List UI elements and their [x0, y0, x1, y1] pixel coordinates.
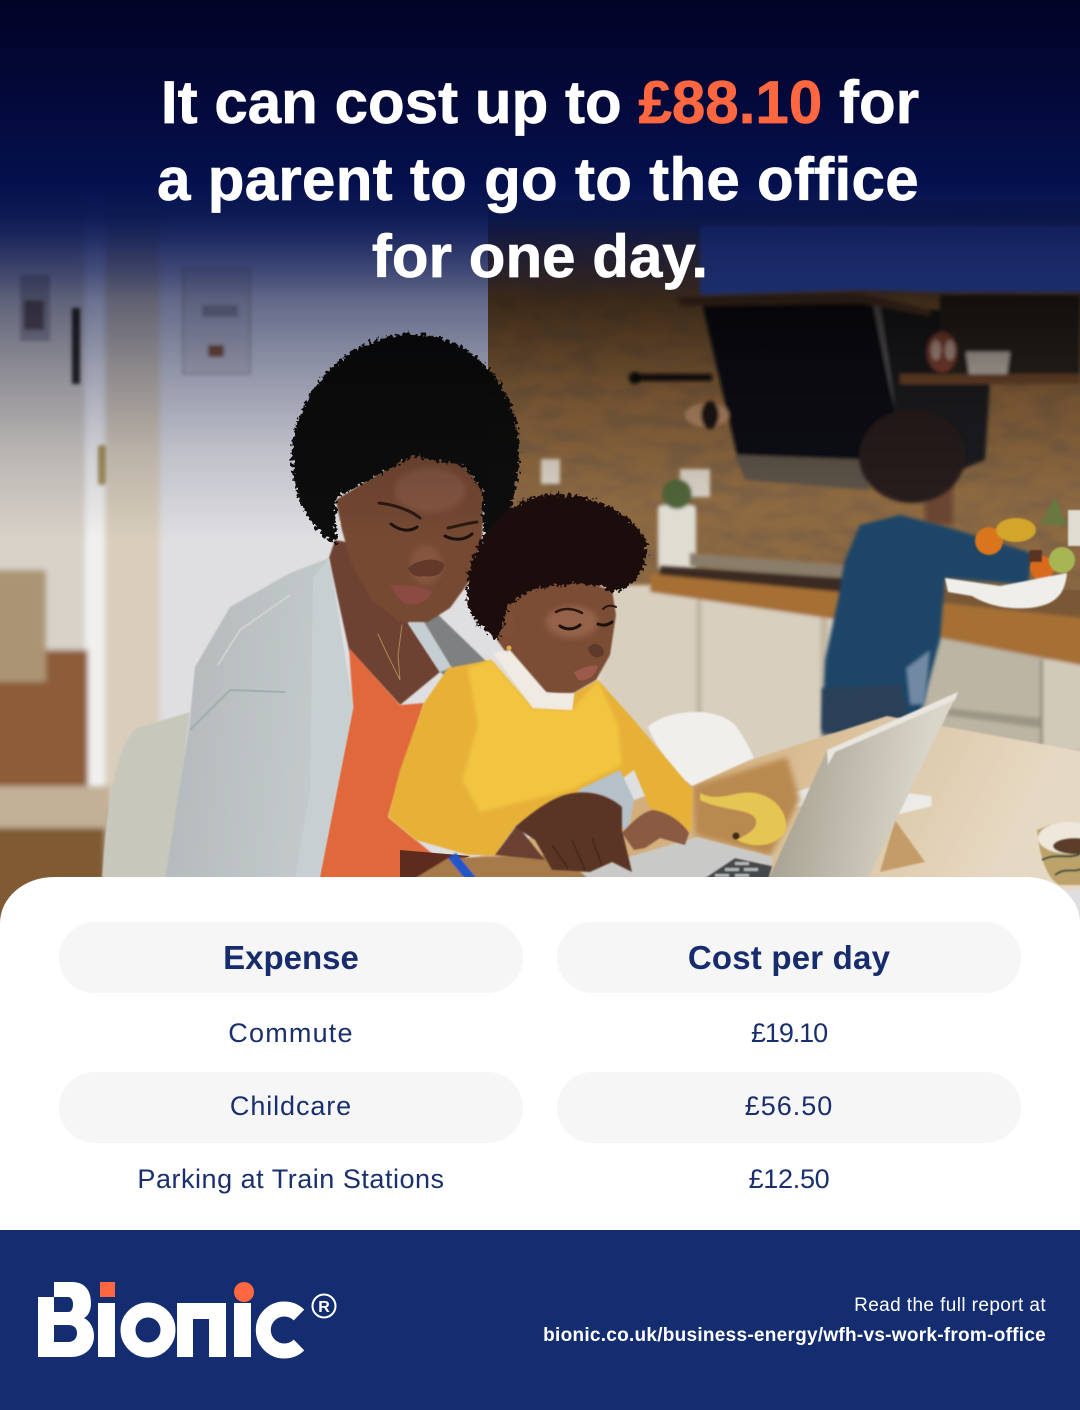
placemat	[693, 757, 800, 856]
hands and pen	[412, 792, 689, 880]
child	[388, 494, 693, 855]
brick wall	[488, 200, 1080, 600]
row: childcare expense: Childcare	[230, 1091, 352, 1121]
mother's sleeve under child's arm	[578, 770, 634, 835]
wall tint gradient	[0, 0, 488, 540]
ear	[496, 607, 514, 639]
title: It can cost up to £88.10 for	[161, 69, 919, 136]
hair	[467, 494, 647, 640]
call to action text: Read the full report at	[854, 1295, 1046, 1316]
footer band	[0, 1230, 1080, 1410]
row background: childcare cost	[557, 1072, 1021, 1143]
background room	[0, 0, 1080, 940]
facial features	[556, 606, 616, 629]
logo: Bionic: R	[318, 1299, 330, 1316]
call to action text	[543, 1295, 1046, 1346]
logo: Bionic	[38, 1282, 336, 1358]
facial features	[378, 503, 477, 680]
face	[495, 580, 616, 695]
fruit bowl	[945, 497, 1080, 608]
hair	[292, 334, 519, 548]
range hood	[702, 303, 897, 460]
orange top	[319, 648, 440, 880]
mother	[165, 334, 519, 880]
brick shading gradient	[488, 230, 1080, 500]
row: commute cost: £19.10	[751, 1018, 827, 1048]
collar	[493, 650, 574, 710]
left chair	[102, 712, 190, 880]
title: for one day.	[372, 223, 708, 290]
blue wall above hood	[700, 225, 1080, 295]
header label: Cost per day: Cost per day	[688, 939, 890, 976]
title: a parent to go to the office	[157, 146, 919, 213]
kitchen counter and cabinets	[600, 553, 1080, 765]
row background: childcare expense	[59, 1072, 523, 1143]
title	[157, 69, 919, 290]
dining table	[400, 716, 1080, 890]
sweater	[388, 660, 693, 855]
upper-right tint	[488, 0, 1080, 230]
header pill: Cost per day	[557, 922, 1021, 993]
top navy overlay	[0, 0, 1080, 300]
face	[336, 452, 484, 622]
neck and chest	[329, 540, 450, 705]
laptop	[560, 692, 958, 880]
header pill: Expense	[59, 922, 523, 993]
row: childcare cost: £56.50	[745, 1091, 833, 1121]
photo: mother and child at a laptop in a kitchen	[0, 0, 1080, 922]
row: parking cost: £12.50	[749, 1164, 829, 1194]
call to action text: bionic.co.uk/business-energy/wfh-vs-work-from-office	[543, 1325, 1046, 1346]
boy at the counter	[822, 409, 1032, 735]
row: parking expense: Parking at Train Stations	[137, 1164, 445, 1194]
panel: cost table	[0, 877, 1080, 1230]
white chair	[648, 712, 754, 786]
cardigan	[165, 558, 353, 880]
banana	[700, 793, 786, 845]
header label: Expense: Expense	[223, 939, 359, 976]
wall decor and kitchen fittings	[20, 268, 1080, 570]
bowl on table	[1037, 822, 1080, 885]
row: commute expense: Commute	[228, 1018, 354, 1048]
grey right band	[408, 602, 490, 680]
brick strip behind right counter	[940, 590, 1080, 650]
